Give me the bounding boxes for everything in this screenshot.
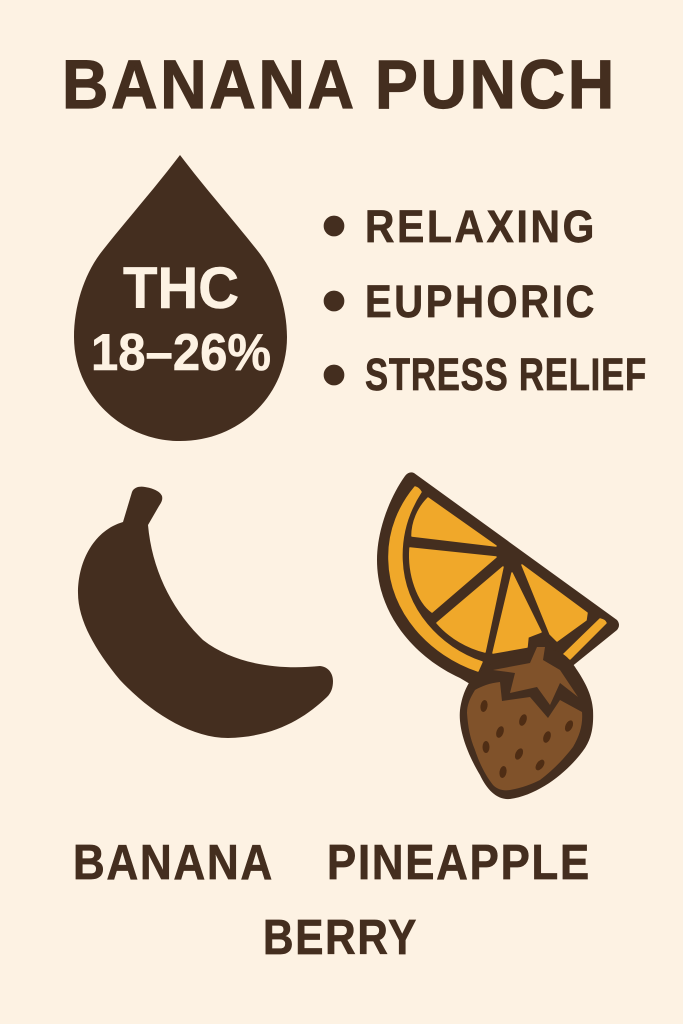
effect: relaxing: RELAXING <box>365 201 597 252</box>
flavor: pineapple: PINEAPPLE <box>327 836 591 890</box>
effect: euphoric: EUPHORIC <box>365 276 597 327</box>
calyx <box>493 647 578 705</box>
flavor: berry: BERRY <box>263 911 418 965</box>
THC droplet <box>74 155 287 441</box>
icon: orange slice and strawberry <box>377 472 619 799</box>
icon: banana <box>78 487 333 738</box>
icon: droplet <box>74 155 287 441</box>
seeds <box>480 699 575 779</box>
THC label: THC <box>123 256 239 321</box>
effects list <box>324 201 647 400</box>
flavor: banana: BANANA <box>73 836 274 890</box>
strawberry <box>460 636 593 799</box>
berry body <box>467 682 582 790</box>
THC range: 18–26% <box>91 324 271 382</box>
title: BANANA PUNCH <box>62 46 617 123</box>
flavor labels <box>73 836 591 965</box>
orange slice <box>377 472 619 684</box>
